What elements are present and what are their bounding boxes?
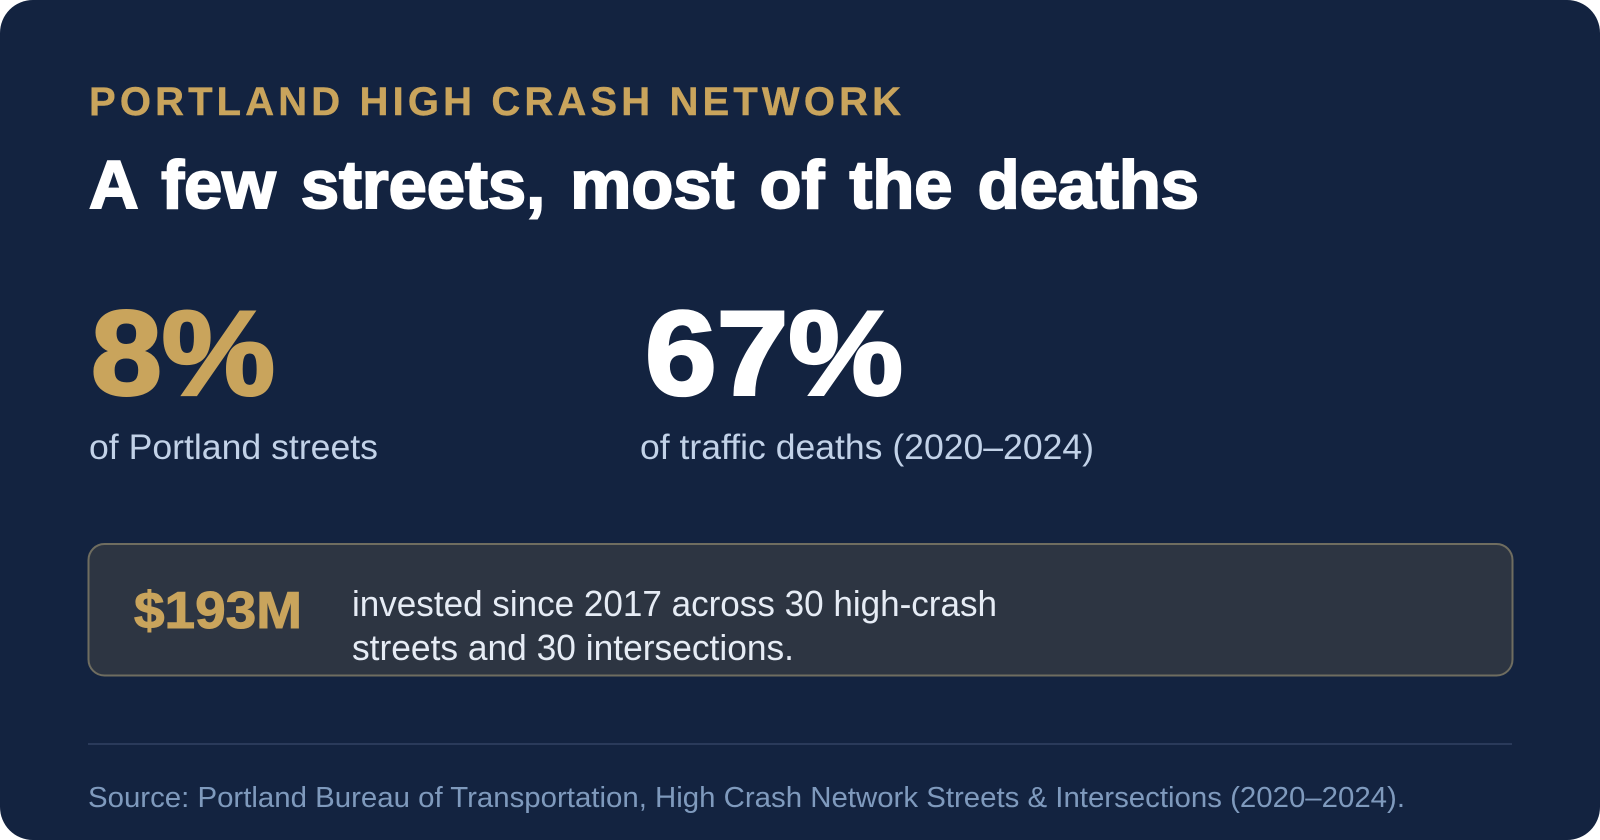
- kicker heading: PORTLAND HIGH CRASH NETWORK: [89, 80, 901, 124]
- stat: 67% of deaths: [640, 286, 1094, 467]
- stat label: of Portland streets: of Portland streets: [89, 428, 378, 467]
- callout text: invested since 2017 across 30 high-crash: [352, 583, 997, 624]
- callout: investment: [88, 544, 1512, 676]
- stat value: 67%: 67%: [645, 286, 903, 420]
- callout box: [88, 544, 1512, 676]
- callout text: [352, 583, 997, 668]
- callout text: streets and 30 intersections.: [352, 627, 794, 668]
- source note: Source: Portland Bureau of Transportation, High Crash Network Streets & Intersections (2020–2024).: [88, 782, 1405, 814]
- stat label: of traffic deaths: of traffic deaths (2020–2024): [640, 428, 1094, 467]
- title: A few streets, most of the deaths: [89, 147, 1199, 223]
- callout value: $193M: $193M: [134, 582, 302, 640]
- stat: 8% of streets: [89, 286, 378, 467]
- stat value: 8%: 8%: [91, 286, 275, 420]
